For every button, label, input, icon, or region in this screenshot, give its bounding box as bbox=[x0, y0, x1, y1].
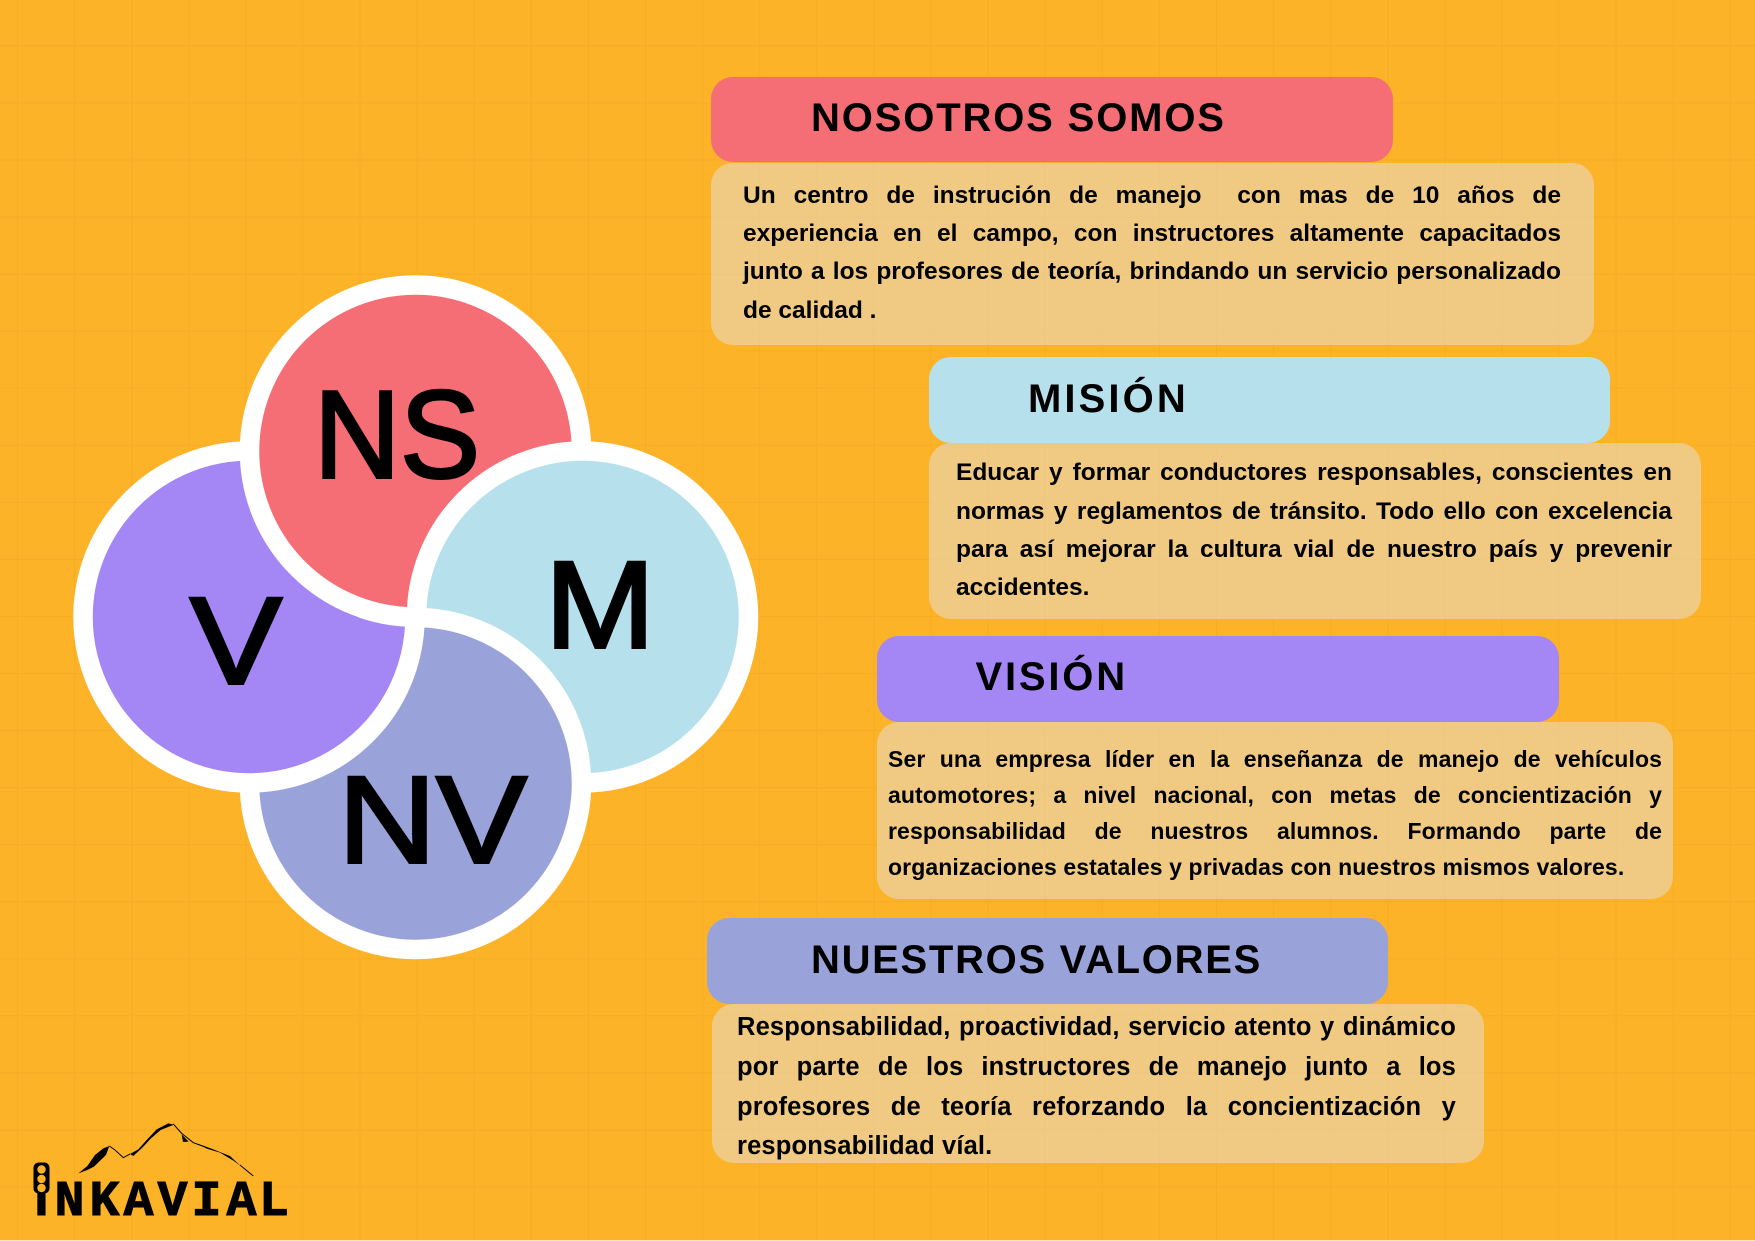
text block: nosotros somos bbox=[711, 163, 1594, 345]
heading: nosotros somos: NOSOTROS SOMOS bbox=[811, 96, 1226, 140]
text block: nosotros somos: experiencia en el campo, con instructores altamente capacitados bbox=[743, 220, 1561, 247]
text block: nuestros valores: responsabilidad víal. bbox=[737, 1132, 992, 1160]
circle: V overlap over NV bbox=[240, 617, 424, 792]
header bar: vision bbox=[877, 636, 1559, 722]
logo icon: mountain bbox=[78, 1123, 253, 1176]
text block: mision: accidentes. bbox=[956, 574, 1089, 601]
text block: mision: Educar y formar conductores responsables, conscientes en bbox=[956, 459, 1672, 486]
logo wordmark: NKAVIAL bbox=[54, 1174, 289, 1231]
circle: V bbox=[83, 451, 415, 783]
text block: nosotros somos: junto a los profesores de teoría, brindando un servicio personalizado bbox=[743, 258, 1561, 285]
text block: nuestros valores: por parte de los instructores de manejo junto a los bbox=[737, 1053, 1456, 1081]
circle: NV bbox=[250, 618, 582, 950]
panel: mision bbox=[929, 357, 1701, 619]
logo wordmark: I bbox=[34, 1170, 48, 1226]
text block: nosotros somos: Un centro de instrución de manejo con mas de 10 años de bbox=[743, 182, 1561, 209]
text block: vision bbox=[877, 722, 1673, 899]
text block: mision: para así mejorar la cultura vial de nuestro país y prevenir bbox=[956, 536, 1672, 563]
letters: V: V bbox=[190, 572, 282, 710]
circle: NS bbox=[250, 285, 582, 617]
panel: nuestros valores bbox=[707, 918, 1484, 1163]
letters: M: M bbox=[545, 536, 655, 674]
letters: NS: NS bbox=[314, 366, 480, 504]
header bar: mision bbox=[929, 357, 1610, 443]
heading: vision: VISIÓN bbox=[976, 655, 1128, 699]
letters: NV: NV bbox=[338, 752, 527, 890]
diagram: four overlapping circles bbox=[34, 275, 758, 1216]
circle: M bbox=[416, 451, 748, 783]
text block: nuestros valores: profesores de teoría reforzando la concientización y bbox=[737, 1093, 1456, 1121]
logo icon: traffic light bbox=[34, 1162, 50, 1194]
header bar: nuestros valores bbox=[707, 918, 1388, 1004]
text block: vision: organizaciones estatales y privadas con nuestros mismos valores. bbox=[888, 854, 1624, 880]
text block: mision bbox=[929, 443, 1701, 619]
bottom edge strip bbox=[0, 1240, 1755, 1241]
panel: vision bbox=[877, 636, 1673, 899]
text block: mision: normas y reglamentos de tránsito. Todo ello con excelencia bbox=[956, 498, 1672, 525]
text block: vision: responsabilidad de nuestros alumnos. Formando parte de bbox=[888, 818, 1662, 844]
header bar: nosotros somos bbox=[711, 77, 1393, 162]
heading: mision: MISIÓN bbox=[1028, 377, 1189, 421]
text block: nuestros valores: Responsabilidad, proactividad, servicio atento y dinámico bbox=[737, 1013, 1456, 1041]
text block: nosotros somos: de calidad . bbox=[743, 297, 876, 324]
panel: nosotros somos bbox=[711, 77, 1594, 345]
text block: vision: automotores; a nivel nacional, con metas de concientización y bbox=[888, 782, 1662, 808]
heading: nuestros valores: NUESTROS VALORES bbox=[811, 938, 1262, 982]
text block: vision: Ser una empresa líder en la enseñanza de manejo de vehículos bbox=[888, 746, 1662, 772]
text block: nuestros valores bbox=[712, 1004, 1484, 1163]
logo: inkavial bbox=[34, 1123, 289, 1231]
